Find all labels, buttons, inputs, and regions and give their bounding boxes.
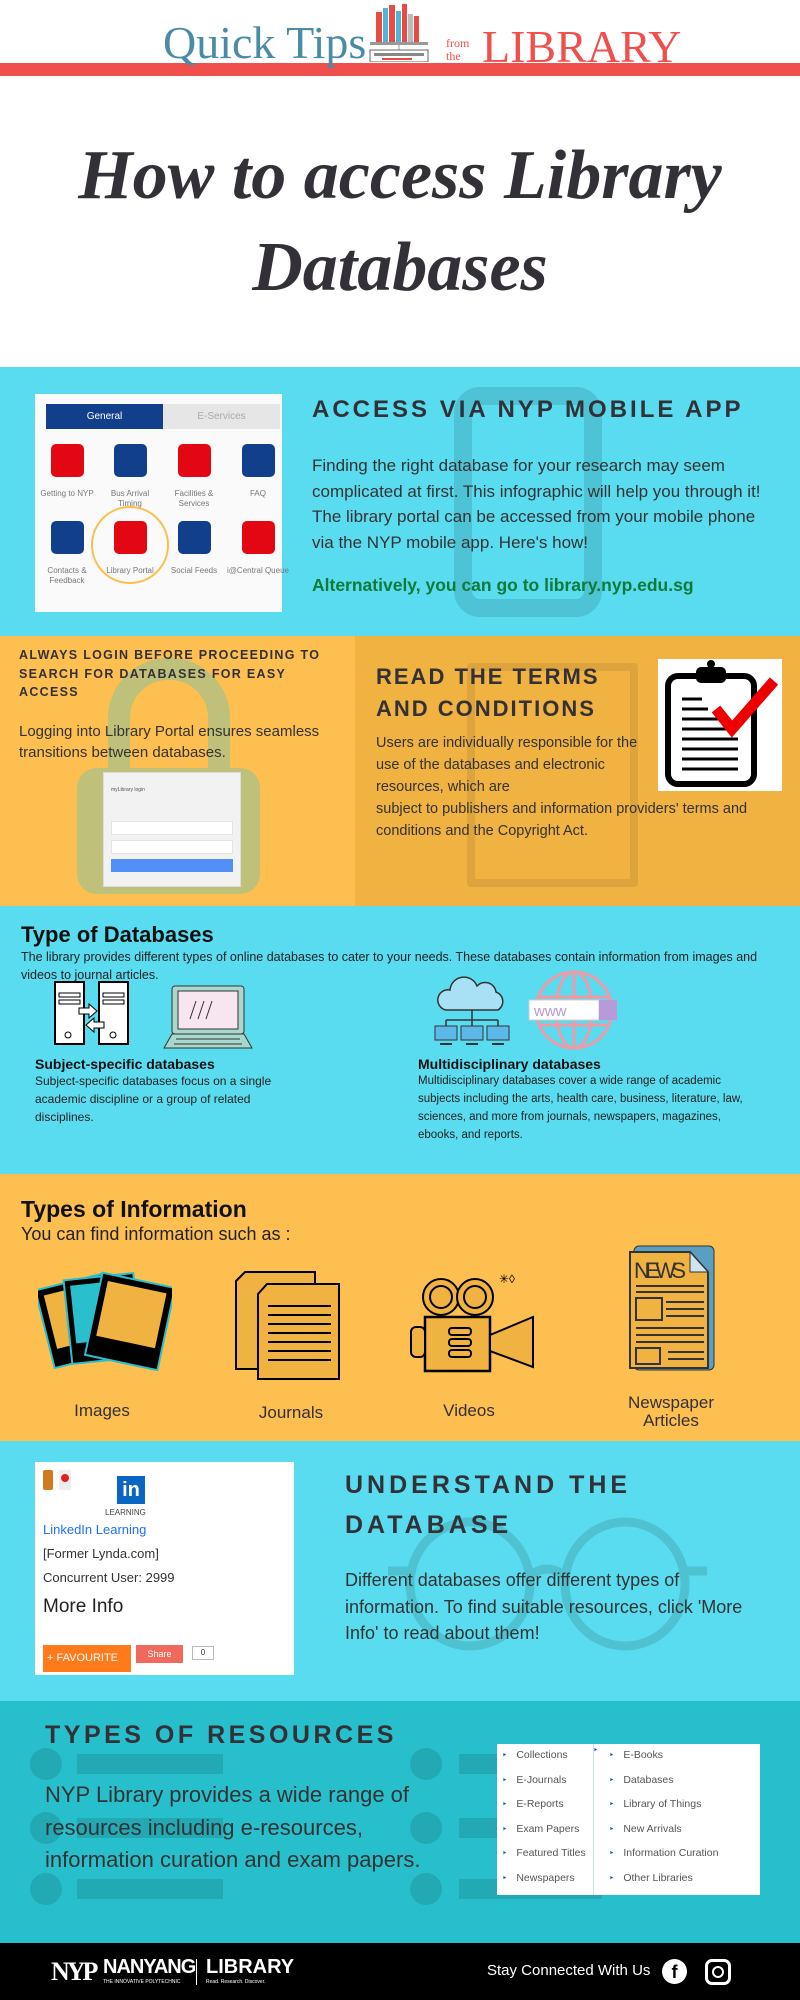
database screenshot: + FAVOURITE xyxy=(47,1652,118,1664)
NYP logo: LIBRARY xyxy=(206,1956,294,1978)
resources list: Exam Papers xyxy=(516,1823,579,1835)
app screenshot: Getting to NYP xyxy=(40,489,94,498)
icon: facebook xyxy=(662,1959,687,1984)
resources list: Featured Titles xyxy=(516,1847,586,1859)
LIBRARY text: LIBRARY xyxy=(482,21,681,72)
paragraph: Finding the right database for your research may seem complicated at first. This infographic will help you through it! The library portal can be accessed from your mobile phone via the NYP mobile app. Here's how! xyxy=(312,456,761,552)
green link text: Alternatively, you can go to library.nyp.edu.sg xyxy=(312,575,694,595)
heading xyxy=(345,1471,631,1539)
panel: understand the database xyxy=(0,1441,800,1701)
icon: video camera: ✳◊ xyxy=(499,1272,515,1286)
NYP logo: Read. Research. Discover. xyxy=(206,1979,265,1985)
label: journals: Journals xyxy=(259,1403,323,1422)
paragraph: Different databases offer different types of information. To find suitable resources, click 'More Info' to read about them! xyxy=(345,1570,742,1643)
NYP logo: NANYANG xyxy=(103,1956,195,1978)
heading: UNDERSTAND THE xyxy=(345,1471,631,1499)
heading xyxy=(19,648,320,699)
panel: read the terms: subject to publishers and information providers' terms and conditions and the Copyright Act. xyxy=(376,801,747,839)
title: How to access Library xyxy=(78,137,722,214)
stay connected: Stay Connected With Us xyxy=(487,1962,650,1979)
panel: access via NYP mobile app xyxy=(0,367,800,636)
icon: laptop xyxy=(163,986,253,1048)
footer xyxy=(0,1943,800,2000)
resources list: New Arrivals xyxy=(623,1823,682,1835)
app screenshot: Facilities & Services xyxy=(175,489,213,508)
database screenshot: More Info xyxy=(43,1596,123,1617)
multidisciplinary block: Multidisciplinary databases cover a wide range of academic subjects including the arts, health care, business, literature, law, sciences, and more from journals, newspapers, magazines, ebooks, and reports. xyxy=(418,1075,743,1141)
resources list: E-Reports xyxy=(516,1798,564,1810)
red header bar xyxy=(0,63,800,76)
icon: instagram xyxy=(705,1959,731,1985)
database screenshot: [Former Lynda.com] xyxy=(43,1546,159,1561)
database screenshot xyxy=(35,1462,294,1675)
label: videos: Videos xyxy=(443,1401,495,1420)
resources list: Library of Things xyxy=(623,1798,701,1810)
panel: types of information xyxy=(0,1174,800,1441)
icon: cloud network xyxy=(434,976,510,1045)
resources list: Databases xyxy=(623,1774,674,1786)
app screenshot: E-Services xyxy=(197,411,246,422)
NYP logo: NYP xyxy=(51,1957,95,1986)
heading: AND CONDITIONS xyxy=(376,696,596,721)
watermark phone xyxy=(454,387,602,617)
app screenshot: General xyxy=(87,411,122,422)
subtitle: You can find information such as : xyxy=(21,1224,290,1244)
title: Databases xyxy=(252,229,548,306)
resources list: Collections xyxy=(516,1749,568,1761)
icon: www globe: www xyxy=(533,1003,567,1020)
panel: type of databases xyxy=(0,906,800,1174)
heading: SEARCH FOR DATABASES FOR EASY xyxy=(19,666,286,680)
heading: ACCESS xyxy=(19,685,79,699)
multidisciplinary block: Multidisciplinary databases xyxy=(418,1056,601,1072)
quick tips text: Quick Tips xyxy=(163,17,366,68)
NYP logo: THE INNOVATIVE POLYTECHNIC xyxy=(103,1979,181,1985)
paragraph: Users are individually responsible for the use of the databases and electronic resources, which are xyxy=(376,735,637,795)
resources list xyxy=(497,1744,760,1895)
icon: newspaper: NEWS xyxy=(634,1258,686,1283)
from the: the xyxy=(446,49,461,63)
icon: servers xyxy=(54,981,129,1045)
subject-specific block: Subject-specific databases xyxy=(35,1056,215,1072)
watermark lock xyxy=(108,658,230,808)
resources list: Newspapers xyxy=(516,1872,575,1884)
app screenshot: Library Portal xyxy=(106,566,154,575)
heading: READ THE TERMS xyxy=(376,664,600,689)
database screenshot: LEARNING xyxy=(105,1508,146,1517)
header: quick tips banner xyxy=(0,4,800,76)
heading: ALWAYS LOGIN BEFORE PROCEEDING TO xyxy=(19,648,320,662)
icon: facebook: f xyxy=(672,1962,678,1982)
resources list: Other Libraries xyxy=(623,1872,693,1884)
watermark glasses xyxy=(388,1518,707,1650)
panel: types of resources xyxy=(0,1701,800,1943)
login screenshot xyxy=(103,772,241,887)
paragraph: NYP Library provides a wide range of resources including e-resources, information curation and exam papers. xyxy=(45,1782,420,1872)
watermark list xyxy=(30,1748,602,1905)
subject-specific block: Subject-specific databases focus on a single academic discipline or a group of related disciplines. xyxy=(35,1074,271,1124)
panel: read the terms xyxy=(355,636,800,906)
icon: video camera xyxy=(410,1272,534,1372)
resources list: E-Books xyxy=(623,1749,663,1761)
icon: clipboard checkmark xyxy=(658,659,782,791)
icon: books on computer xyxy=(370,4,428,62)
icon: newspaper xyxy=(629,1246,714,1370)
heading: TYPES OF RESOURCES xyxy=(45,1721,397,1749)
from the xyxy=(446,36,470,63)
icon: journals xyxy=(235,1271,340,1380)
resources list: Information Curation xyxy=(623,1847,718,1859)
label: images: Images xyxy=(74,1401,130,1420)
paragraph: Logging into Library Portal ensures seamless transitions between databases. xyxy=(19,723,319,761)
heading: Types of Information xyxy=(21,1196,247,1222)
app screenshot: Bus Arrival Timing xyxy=(111,489,149,508)
database screenshot: 0 xyxy=(201,1648,205,1657)
heading: ACCESS VIA NYP MOBILE APP xyxy=(312,396,744,423)
icon: images xyxy=(38,1272,172,1371)
heading: Type of Databases xyxy=(21,922,214,947)
database screenshot: in xyxy=(122,1479,140,1501)
resources list: E-Journals xyxy=(516,1774,567,1786)
from the: from xyxy=(446,36,469,50)
title xyxy=(78,137,722,306)
app screenshot: i@Central Queue xyxy=(227,566,289,575)
login screenshot: myLibrary login xyxy=(111,787,145,793)
panel: login xyxy=(0,636,355,906)
app screenshot xyxy=(35,394,282,612)
icon: www globe xyxy=(528,970,617,1050)
database screenshot: Share xyxy=(147,1649,172,1659)
app screenshot: FAQ xyxy=(250,489,266,498)
app screenshot: Contacts & Feedback xyxy=(47,566,87,585)
watermark document xyxy=(467,663,638,887)
heading: DATABASE xyxy=(345,1511,512,1539)
database screenshot: LinkedIn Learning xyxy=(43,1522,146,1537)
app screenshot: Social Feeds xyxy=(171,566,217,575)
heading xyxy=(376,664,600,721)
intro text: The library provides different types of online databases to cater to your needs. These databases contain information from images and videos to journal articles. xyxy=(21,950,757,982)
database screenshot: Concurrent User: 2999 xyxy=(43,1570,175,1585)
NYP logo xyxy=(51,1956,294,1986)
label: newspaper articles: Newspaper Articles xyxy=(628,1393,714,1430)
